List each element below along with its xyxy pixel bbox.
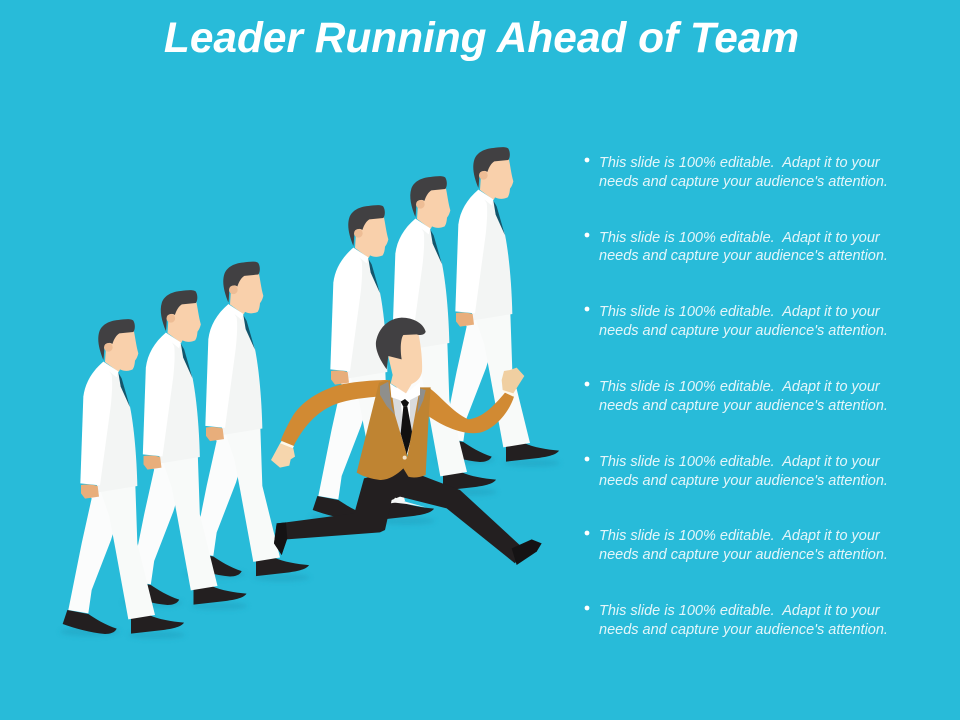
bullet 1: This slide is 100% editable. Adapt it to your <box>599 155 881 171</box>
leader: lapels <box>380 382 426 415</box>
team member 2 <box>122 290 247 610</box>
leader: shirt and tie <box>388 383 420 457</box>
leader: legs and shoes <box>274 468 542 565</box>
leader running ahead <box>271 318 542 565</box>
bullet 3 <box>585 304 888 339</box>
bullet 7: needs and capture your audience's attention. <box>599 622 888 638</box>
bullet 2 <box>585 230 888 264</box>
bullet 4: This slide is 100% editable. Adapt it to your <box>599 379 881 395</box>
bullet 2: needs and capture your audience's attention. <box>599 248 888 264</box>
bullet 5: This slide is 100% editable. Adapt it to your <box>599 454 881 470</box>
leader: left arm <box>281 380 388 447</box>
team member 1 (front) <box>60 319 185 639</box>
bullet 5 <box>585 454 888 489</box>
leader: collar <box>390 382 420 400</box>
bullet 4 <box>585 379 888 414</box>
bullet 1: needs and capture your audience's attention. <box>599 174 888 190</box>
team member 4 <box>310 205 435 525</box>
leader: jacket <box>357 380 431 480</box>
leader: head <box>376 318 426 393</box>
bullet 7 <box>585 603 888 638</box>
bullet 2: This slide is 100% editable. Adapt it to your <box>599 230 881 246</box>
leader: hands <box>271 368 524 468</box>
team member 3 <box>185 262 310 581</box>
team member 5 <box>372 176 497 496</box>
title: Leader Running Ahead of Team <box>164 14 799 61</box>
bullet 3: needs and capture your audience's attention. <box>599 323 888 339</box>
bullet 6 <box>585 528 888 563</box>
bullet 4: needs and capture your audience's attention. <box>599 398 888 414</box>
leader: right arm <box>427 387 514 433</box>
bullet 3: This slide is 100% editable. Adapt it to your <box>599 304 881 320</box>
team member 6 (back) <box>435 147 560 467</box>
bullet 5: needs and capture your audience's attention. <box>599 473 888 489</box>
bullet 7: This slide is 100% editable. Adapt it to your <box>599 603 881 619</box>
bullet 6: This slide is 100% editable. Adapt it to your <box>599 528 881 544</box>
bullet 6: needs and capture your audience's attention. <box>599 547 888 563</box>
bullet list <box>585 155 888 638</box>
bullet 1 <box>585 155 888 190</box>
